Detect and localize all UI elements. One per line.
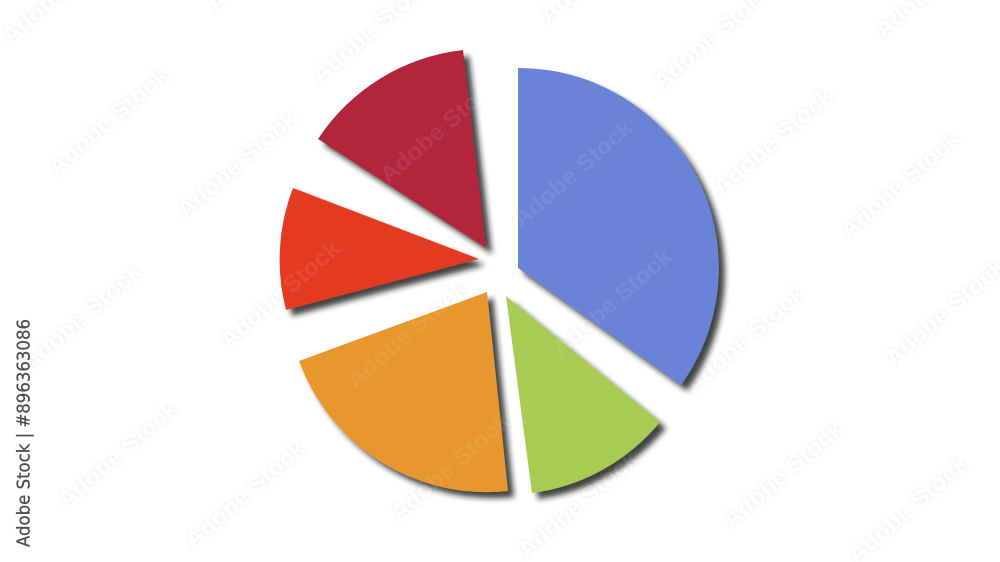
watermark pattern on background: Adobe Stock [880,253,1000,371]
watermark pattern on background: Adobe Stock [172,105,302,223]
exploded pie chart [280,50,719,493]
slice: green [506,296,660,493]
watermark pattern on background: Adobe Stock [43,62,173,180]
watermark pattern on background: Adobe Stock [385,408,515,526]
slice: orange [299,292,508,492]
watermark pattern over pie slices: Adobe Stock [342,275,472,393]
slice: blue, largest [518,68,719,385]
vertical stock ID text: Adobe Stock | #896363086 [14,319,34,547]
watermark pattern over pie slices: Adobe Stock [215,235,345,353]
slice: crimson [318,50,486,248]
watermark pattern on background: Adobe Stock [17,258,147,376]
watermark pattern on background: Adobe Stock [180,435,310,553]
slice: red [280,188,479,310]
watermark pattern on background: Adobe Stock [547,243,677,361]
watermark pattern over pie slices: Adobe Stock [513,445,643,562]
watermark pattern over pie slices: Adobe Stock [385,408,515,526]
watermark pattern on background: Adobe Stock [53,395,183,513]
watermark pattern over pie slices: Adobe Stock [547,243,677,361]
watermark pattern on background: Adobe Stock [718,415,848,533]
watermark pattern on background: Adobe Stock [835,125,965,243]
watermark pattern on background: Adobe Stock [215,235,345,353]
watermark pattern over pie slices [215,70,677,562]
watermark pattern on background: Adobe Stock [708,82,838,200]
watermark pattern over pie slices: Adobe Stock [375,70,505,188]
watermark pattern over pie slices: Adobe Stock [508,114,638,232]
watermark pattern on background: Adobe Stock [342,275,472,393]
watermark pattern on background: Adobe Stock [513,445,643,562]
watermark pattern on background: Adobe Stock [680,280,810,398]
